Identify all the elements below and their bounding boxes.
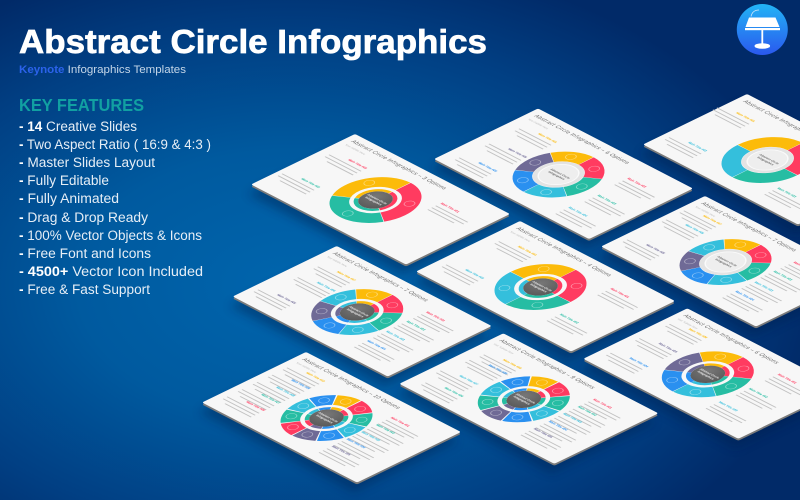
text block: cyan: Main Title #04: [567, 206, 589, 217]
text block: red: [580, 398, 628, 422]
text block: purple: [619, 236, 666, 260]
hub text: Abstract Circle: [758, 153, 781, 165]
text block: purple: Main Title #05: [276, 294, 297, 305]
text block: purple: [319, 445, 366, 469]
text block: blue right: Main Title #04: [547, 420, 569, 431]
feature list: - Fully Animated: [19, 191, 119, 206]
text block: red top: Main Title #03: [347, 159, 368, 170]
text block: purple: Main Title #05: [645, 244, 666, 255]
text block: yellow: Main Title #07: [701, 215, 723, 226]
text block: purple: [521, 428, 568, 451]
text block: red right: Main Title #01: [439, 202, 461, 213]
slide: bottom centre, nine options, dark hub: [396, 333, 658, 473]
text block: yellow: Main Title #06: [687, 328, 709, 339]
hub text: Abstract Circle: [531, 280, 554, 292]
text block: blue: Main Title #05: [477, 162, 499, 173]
donut chart: [306, 165, 445, 235]
text block: yellow: [662, 321, 709, 344]
text block: yellow: [709, 104, 756, 128]
slide: bottom left, ten options, dark hub: [199, 352, 461, 492]
text block: blue: Main Title #04: [628, 357, 650, 368]
text block: red right: Main Title #01: [389, 416, 411, 427]
text block: blue: [602, 350, 650, 373]
hub text: Abstract Circle: [716, 255, 739, 267]
text block: blue: [723, 290, 770, 314]
text block: blue: Main Title #04: [366, 340, 387, 351]
text block: red: Main Title #06: [245, 401, 266, 412]
slide: bottom right, six options, dark hub: [580, 308, 800, 448]
slide title: Abstract Circle Infographics – 4 Options: [514, 227, 613, 278]
text block: cyan: Main Title #07: [458, 375, 480, 386]
text block: red: Main Title #01: [592, 398, 613, 409]
text block: purple: Main Title #05: [657, 342, 679, 353]
donut chart: [255, 382, 398, 454]
slide subtitle: Your Subtitle Here: [527, 118, 550, 130]
hub text: Infographics: [756, 156, 775, 166]
slide title: Abstract Circle Infographics – 6 Options: [681, 314, 780, 365]
text block: red: Main Title #01: [609, 288, 631, 299]
hub text: Abstract Circle: [317, 411, 340, 423]
text block: blue right: Main Title #04: [345, 438, 367, 449]
text block: purple: Main Title #05: [330, 445, 352, 456]
text block: cyan right: Main Title #03: [360, 431, 382, 442]
text block: cyan lower: [373, 330, 420, 354]
feature list: - 4500+ Vector Icon Included: [19, 264, 203, 279]
text block: cyan right: [349, 431, 396, 455]
text block: yellow: [310, 263, 357, 287]
slide: centre, four options, dark hub: [413, 221, 675, 361]
text block: blue: [451, 154, 499, 178]
text block: green: [765, 187, 800, 211]
text block: green right: [363, 424, 410, 447]
text block: red top: [321, 151, 368, 175]
text block: yellow: [476, 351, 523, 375]
text block: cyan: [432, 367, 480, 391]
feature list: - Fully Editable: [19, 173, 109, 188]
text block: cyan right: [550, 413, 598, 436]
text block: purple: [632, 335, 679, 359]
text block: yellow: Main Title #04: [516, 245, 538, 256]
text block: blue: Main Title #08: [487, 364, 509, 375]
slide subtitle: Your Subtitle Here: [509, 230, 532, 243]
slide: three options, dark hub: [248, 134, 510, 274]
hub text: Infographics: [315, 414, 334, 424]
hub text: Abstract Circle: [366, 193, 389, 205]
text block: blue: [461, 357, 509, 380]
text block: green: [418, 379, 465, 403]
feature list: - 14 Creative Slides: [19, 119, 137, 134]
text block: red: Main Title #01: [776, 373, 798, 384]
text block: cyan: [556, 206, 603, 230]
text block: red right: [378, 416, 425, 440]
text block: cyan upper: [290, 274, 337, 298]
donut chart: [489, 140, 628, 209]
slide: six options, light hub: [431, 108, 693, 248]
text block: green: Main Title #02: [772, 270, 794, 281]
donut chart: [717, 135, 800, 185]
donut chart: [452, 363, 596, 435]
text block: cyan upper: [658, 216, 705, 240]
text block: cyan: Main Title #03: [717, 401, 739, 412]
text block: red: [615, 177, 662, 201]
hub text: Infographics: [696, 370, 716, 380]
hub text: Infographics: [364, 196, 383, 206]
donut chart: [638, 340, 777, 409]
text block: green: Main Title #02: [300, 178, 321, 189]
slide subtitle: Your Subtitle Here: [295, 361, 318, 374]
slide title: Abstract Circle Infographics – 9 Options: [497, 339, 596, 390]
subtitle: Keynote Infographics Templates: [19, 64, 187, 76]
hub text: Infographics: [714, 258, 733, 268]
text block: green: [274, 170, 321, 194]
text block: yellow: Main Title #10: [305, 372, 326, 383]
hub text: Abstract Circle: [698, 368, 721, 379]
donut chart: [654, 226, 797, 298]
slide: top right, four segments with light hub: [640, 94, 800, 234]
slide title: Abstract Circle Infographics – 6 Options: [532, 114, 631, 165]
hub text: Abstract Circle: [549, 168, 572, 180]
text block: blue: Main Title #09: [290, 379, 311, 390]
text block: red: [219, 393, 266, 417]
key features heading: KEY FEATURES: [19, 95, 144, 115]
slide subtitle: Your Subtitle Here: [676, 318, 700, 330]
slide subtitle: Your Subtitle Here: [325, 255, 349, 268]
text block: red: [598, 288, 645, 311]
text block: yellow: [676, 207, 723, 231]
text block: red: Main Title #01: [425, 311, 446, 322]
icon: keynote app: [737, 4, 788, 55]
text block: cyan right: Main Title #03: [562, 413, 583, 424]
text block: yellow: Main Title #09: [501, 359, 523, 370]
text block: cyan: Main Title #03: [464, 269, 485, 280]
feature list: - Drag & Drop Ready: [19, 210, 148, 225]
hub text: Infographics: [345, 308, 365, 318]
text block: green: Main Title #02: [747, 387, 769, 399]
slide subtitle: Your Subtitle Here: [492, 343, 516, 355]
donut chart: [286, 276, 429, 348]
text block: cyan upper: Main Title #06: [315, 281, 337, 292]
text block: cyan: [706, 401, 753, 425]
text block: yellow: Main Title #07: [335, 271, 357, 282]
text block: green: Main Title #07: [260, 393, 282, 404]
slide title: Abstract Circle Infographics – 3 Options: [349, 140, 448, 191]
text block: green right: Main Title #02: [375, 424, 396, 435]
text block: yellow: [279, 364, 326, 388]
text block: yellow: [491, 238, 538, 262]
text block: green: Main Title #03: [596, 194, 618, 205]
slide title: Abstract Circle Infographics – 7 Options: [699, 202, 798, 253]
slide: right, seven options, light hub: [598, 196, 800, 336]
text block: cyan upper: Main Title #06: [684, 224, 705, 235]
text block: cyan lower: Main Title #03: [753, 281, 775, 292]
text block: cyan: Main Title #08: [275, 386, 296, 397]
text block: yellow: [511, 125, 558, 149]
text block: purple: [481, 140, 528, 164]
text block: purple: [250, 286, 297, 310]
text block: blue right: [536, 420, 583, 444]
hub text: Infographics: [529, 283, 548, 293]
text block: blue: [264, 371, 311, 395]
text block: yellow: Main Title #01: [537, 133, 558, 144]
text block: cyan lower: Main Title #03: [385, 330, 406, 341]
feature list: - Master Slides Layout: [19, 155, 155, 170]
feature list: - 100% Vector Objects & Icons: [19, 228, 202, 243]
text block: green: [547, 313, 594, 337]
feature list: [19, 119, 211, 297]
text block: purple: Main Title #05: [532, 428, 554, 439]
text block: red: [765, 373, 800, 397]
text block: green right: Main Title #02: [576, 406, 598, 417]
text block: cyan: [249, 379, 296, 403]
text block: green: Main Title #02: [558, 313, 580, 324]
feature list: - Free & Fast Support: [19, 282, 150, 297]
text block: green: [761, 270, 800, 294]
text block: cyan: [661, 134, 708, 158]
main title: Abstract Circle Infographics: [19, 23, 487, 60]
text block: green: Main Title #03: [776, 187, 798, 198]
text block: red right: [428, 202, 475, 226]
text block: green: [736, 387, 783, 411]
text block: purple: Main Title #06: [507, 148, 528, 159]
text block: red: [413, 311, 461, 335]
hub text: Infographics: [512, 395, 532, 405]
feature list: - Free Font and Icons: [19, 246, 151, 261]
text block: green: [394, 320, 441, 344]
text block: yellow: Main Title #01: [735, 112, 756, 123]
text block: blue: [354, 340, 402, 363]
text block: green right: [565, 406, 612, 429]
text block: cyan: [438, 261, 485, 285]
slide: left, seven options, dark hub: [230, 246, 492, 386]
text block: blue right: [334, 438, 381, 462]
hub text: Abstract Circle: [348, 305, 370, 317]
text block: blue: Main Title #04: [734, 290, 756, 301]
hub text: Abstract Circle: [514, 393, 537, 404]
text block: cyan lower: [742, 281, 789, 305]
text block: red: [781, 261, 800, 285]
donut chart: [490, 262, 592, 312]
text block: green: [585, 194, 632, 218]
slide title: Abstract Circle Infographics – 10 Options: [300, 358, 402, 410]
slide subtitle: Your Subtitle Here: [694, 205, 717, 218]
slide subtitle: Your Subtitle Here: [344, 143, 367, 156]
hub text: Infographics: [547, 171, 566, 181]
slide title: Abstract Circle Infographics – 7 Options: [330, 252, 430, 303]
text block: red: Main Title #02: [626, 177, 648, 188]
feature list: - Two Aspect Ratio ( 16:9 & 4:3 ): [19, 137, 211, 152]
text block: green: [234, 386, 282, 410]
text block: green: Main Title #06: [443, 387, 465, 398]
text block: cyan: Main Title #02: [687, 141, 708, 152]
text block: green: Main Title #02: [405, 320, 427, 331]
